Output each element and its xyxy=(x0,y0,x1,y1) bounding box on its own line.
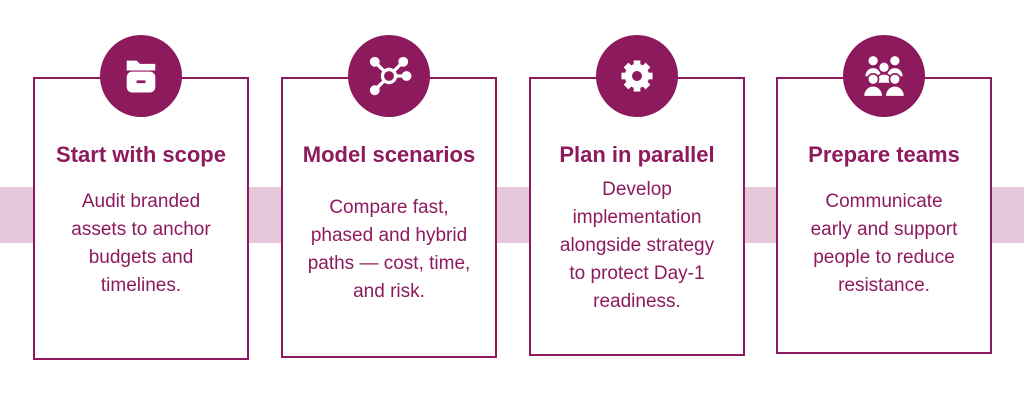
text: plan in parallel xyxy=(560,179,714,312)
panel: start with scope xyxy=(33,77,249,360)
text: plan in parallel: Develop xyxy=(602,179,672,200)
text: model scenarios: paths — cost, time, xyxy=(308,253,470,274)
panel: prepare teams xyxy=(776,77,992,354)
text: prepare teams: resistance. xyxy=(838,275,930,296)
text: start with scope: assets to anchor xyxy=(71,219,211,240)
panel: plan in parallel xyxy=(529,77,745,356)
text: plan in parallel: readiness. xyxy=(593,291,681,312)
icon: people xyxy=(843,35,925,117)
heading: plan in parallel: Plan in parallel xyxy=(559,142,715,167)
text: start with scope: budgets and xyxy=(89,247,193,268)
text: plan in parallel: implementation xyxy=(573,207,701,228)
text: start with scope: timelines. xyxy=(101,275,181,296)
heading: prepare teams: Prepare teams xyxy=(808,142,960,167)
panel: model scenarios xyxy=(281,77,497,358)
text: prepare teams: people to reduce xyxy=(813,247,955,268)
text: model scenarios: and risk. xyxy=(353,281,425,302)
text: start with scope: Audit branded xyxy=(82,191,200,212)
text: start with scope xyxy=(71,191,211,296)
text: prepare teams: early and support xyxy=(811,219,957,240)
text: prepare teams: Communicate xyxy=(825,191,943,212)
text: model scenarios: phased and hybrid xyxy=(311,225,467,246)
text: plan in parallel: alongside strategy xyxy=(560,235,714,256)
text: model scenarios xyxy=(308,197,470,302)
heading: model scenarios: Model scenarios xyxy=(303,142,475,167)
text: prepare teams xyxy=(811,191,958,296)
icon: network xyxy=(348,35,430,117)
icon: folder xyxy=(100,35,182,117)
text: plan in parallel: to protect Day-1 xyxy=(569,263,705,284)
text: model scenarios: Compare fast, xyxy=(329,197,449,218)
icon: gear xyxy=(596,35,678,117)
heading: start with scope: Start with scope xyxy=(56,142,226,167)
